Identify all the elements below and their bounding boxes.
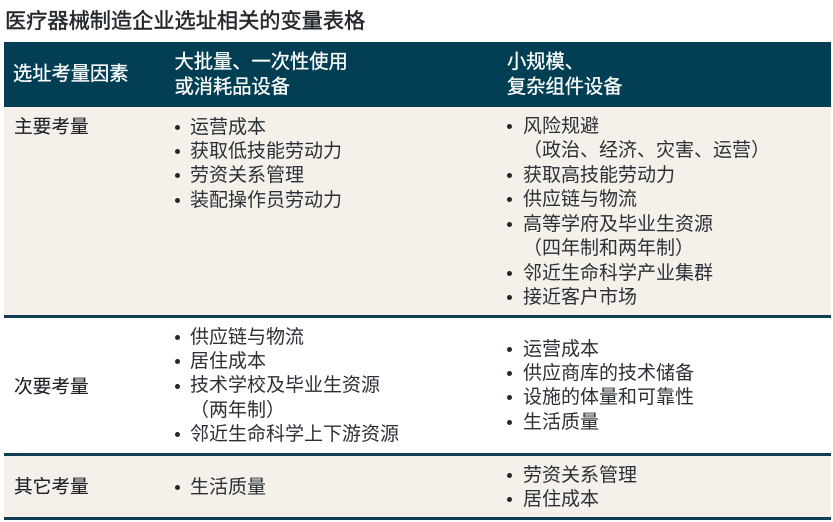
list: secondary high volume: 邻近生命科学上下游资源 [190,424,399,445]
list: primary small scale: 接近客户市场 [523,287,637,308]
row band: primary [4,107,831,315]
row band: other [4,456,831,517]
list: primary small scale: 邻近生命科学产业集群 [523,263,713,284]
list: primary small scale: 风险规避 [523,116,599,137]
list: primary high volume: 劳资关系管理 [190,165,304,186]
header: high volume: 大批量、一次性使用 [174,52,348,73]
list: other small scale [507,464,637,510]
list: primary small scale: 供应链与物流 [523,189,637,210]
row label: primary: 主要考量 [14,116,89,137]
list: primary small scale: （四年制和两年制） [523,238,694,259]
list: secondary high volume: 供应链与物流 [190,327,304,348]
header: high volume: 或消耗品设备 [174,77,290,98]
list: secondary high volume [175,326,399,445]
header: factors: 选址考量因素 [13,64,128,85]
list: secondary small scale: 设施的体量和可靠性 [523,387,694,408]
list: secondary high volume: 居住成本 [190,351,266,372]
list: other high volume: 生活质量 [190,477,266,498]
list: primary small scale: 获取高技能劳动力 [523,165,675,186]
list: secondary small scale: 生活质量 [523,412,599,433]
list: secondary high volume: （两年制） [190,400,285,421]
list: primary small scale: 高等学府及毕业生资源 [523,214,713,235]
list: primary high volume: 运营成本 [190,117,266,138]
list: primary high volume [175,117,342,211]
list: secondary small scale [507,339,694,433]
list: primary high volume: 获取低技能劳动力 [190,141,342,162]
table header band [4,42,831,107]
list: other small scale: 居住成本 [523,489,599,510]
list: secondary high volume: 技术学校及毕业生资源 [190,375,380,396]
title: 医疗器械制造企业选址相关的变量表格 [5,10,365,33]
list: other small scale: 劳资关系管理 [523,465,637,486]
header: small scale: 复杂组件设备 [507,77,622,98]
header: high volume [174,51,348,98]
row label: secondary: 次要考量 [14,376,89,397]
header: small scale: 小规模、 [507,52,584,73]
list: secondary small scale: 运营成本 [523,339,599,360]
list: primary small scale [507,116,770,308]
list: primary high volume: 装配操作员劳动力 [190,190,342,211]
row label: other: 其它考量 [14,476,89,497]
header: small scale [507,51,622,98]
list: secondary small scale: 供应商库的技术储备 [523,363,694,384]
list: primary small scale: （政治、经济、灾害、运营） [523,140,770,161]
